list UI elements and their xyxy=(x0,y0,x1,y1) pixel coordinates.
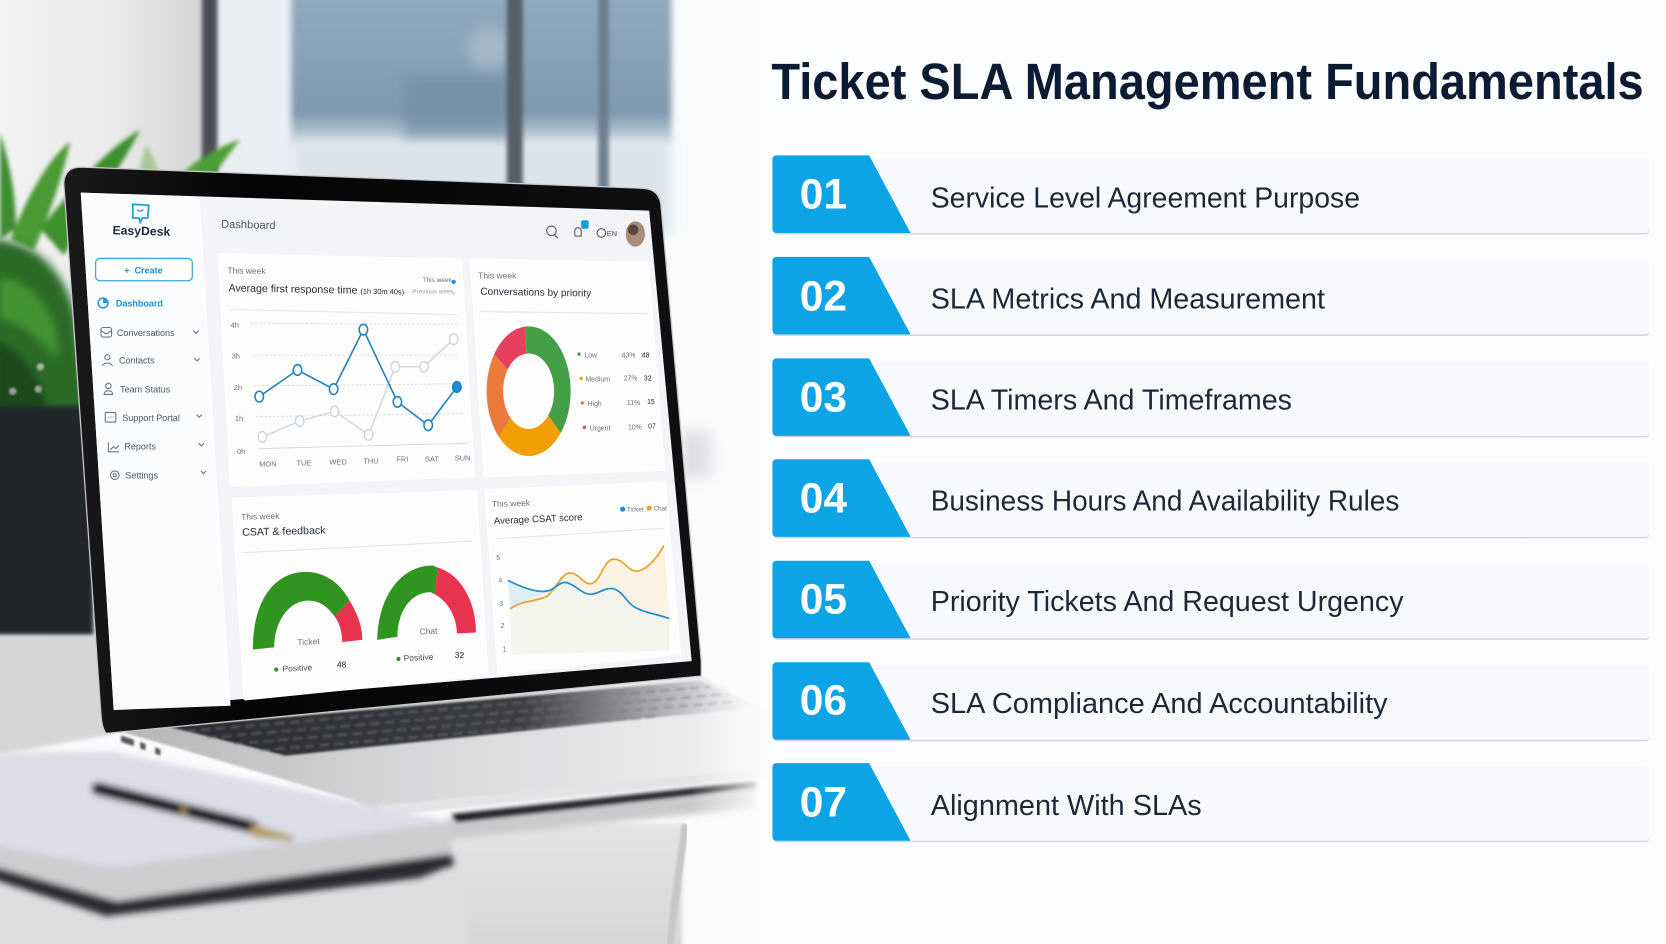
row 02 xyxy=(772,257,1649,336)
card: average first response time: MON xyxy=(259,460,277,469)
donut legend: 43% xyxy=(622,352,635,359)
donut legend: Medium xyxy=(585,377,610,384)
card: average first response time: 0h xyxy=(237,447,245,456)
card: average first response time xyxy=(220,255,473,485)
gauge: chat: Chat xyxy=(419,626,438,637)
area chart xyxy=(508,545,669,655)
card: average CSAT score: Ticket xyxy=(627,506,644,513)
sidebar menu: Reports xyxy=(124,442,156,452)
top bar: Dashboard xyxy=(221,219,276,232)
row 04: Business Hours And Availability Rules xyxy=(931,485,1399,517)
donut chart xyxy=(487,326,571,456)
keyboard xyxy=(166,680,760,756)
card: average CSAT score xyxy=(487,484,679,673)
sidebar xyxy=(81,193,231,710)
card: CSAT and feedback: CSAT & feedback xyxy=(242,525,326,539)
top bar xyxy=(221,219,645,247)
sidebar menu: Support Portal xyxy=(122,413,180,423)
card: average first response time: 3h xyxy=(232,351,240,360)
row 04: 04 xyxy=(800,475,847,522)
card: average CSAT score: This week xyxy=(492,498,531,509)
card: average first response time: FRI xyxy=(396,454,408,463)
card: average first response time: SUN xyxy=(455,453,470,462)
row 01: Service Level Agreement Purpose xyxy=(931,182,1360,214)
row 03: SLA Timers And Timeframes xyxy=(931,384,1292,416)
row 04 xyxy=(772,459,1649,538)
card: conversations by priority: Conversations by priority xyxy=(480,287,592,300)
card: conversations by priority xyxy=(472,261,663,475)
donut legend: 27% xyxy=(624,376,637,383)
donut legend: 15 xyxy=(647,399,655,406)
gauge: chat xyxy=(377,566,476,663)
card: average CSAT score: 1 xyxy=(503,647,507,654)
card: CSAT and feedback: This week xyxy=(241,511,280,522)
card: average first response time: This week xyxy=(423,277,452,284)
photo background: office window and wall xyxy=(0,0,771,944)
gauge: chat: 32 xyxy=(455,650,464,660)
row 07: Alignment With SLAs xyxy=(931,790,1202,822)
gauge: ticket: 48 xyxy=(337,659,347,669)
card: average first response time: 4h xyxy=(231,321,239,330)
notebook and pen xyxy=(0,751,454,916)
donut legend: 48 xyxy=(642,352,650,359)
donut legend xyxy=(577,352,656,433)
row 05: Priority Tickets And Request Urgency xyxy=(931,586,1404,618)
card: average CSAT score: 5 xyxy=(496,555,500,562)
card: average CSAT score: 3 xyxy=(499,601,503,608)
donut legend: 10% xyxy=(628,425,642,432)
sidebar menu xyxy=(98,298,206,480)
card: average first response time: This week xyxy=(227,265,267,276)
this week line xyxy=(255,324,461,431)
sidebar menu: Dashboard xyxy=(116,298,163,308)
card: CSAT and feedback xyxy=(234,492,487,698)
gauge: ticket xyxy=(253,572,362,674)
laptop base and keyboard xyxy=(109,676,767,822)
card: average CSAT score: Chat xyxy=(653,505,667,512)
laptop screen: dashboard xyxy=(81,193,692,710)
logo: EasyDesk xyxy=(112,223,171,239)
row 05 xyxy=(772,561,1649,640)
laptop lid xyxy=(64,167,701,733)
row 06 xyxy=(772,662,1649,741)
card: average first response time: THU xyxy=(363,457,379,466)
gauge: ticket: Ticket xyxy=(297,636,321,647)
laptop ports xyxy=(121,736,160,756)
plant xyxy=(0,130,240,636)
card: average first response time: WED xyxy=(329,458,347,467)
card: average first response time: Average first response time (1h 30m 40s) xyxy=(228,282,405,297)
card: average first response time: SAT xyxy=(425,454,439,463)
row 02: 02 xyxy=(800,274,847,321)
pen xyxy=(98,789,291,839)
card: average CSAT score: 2 xyxy=(500,623,504,630)
row 06: 06 xyxy=(800,677,847,724)
row 03 xyxy=(772,358,1649,437)
card: average first response time: TUE xyxy=(296,459,311,468)
donut legend: Urgent xyxy=(590,426,610,433)
create button xyxy=(96,258,192,281)
row 05: 05 xyxy=(800,576,847,623)
row 01: 01 xyxy=(800,171,847,218)
sidebar menu: Settings xyxy=(125,470,158,480)
logo xyxy=(112,204,171,239)
donut legend: Low xyxy=(584,352,597,359)
card: conversations by priority: This week xyxy=(478,271,517,281)
sidebar menu: Contacts xyxy=(119,356,155,366)
card: average first response time: Previous week xyxy=(412,289,454,296)
top bar: EN xyxy=(607,229,617,238)
donut legend: 07 xyxy=(648,423,656,430)
row 03: 03 xyxy=(800,374,847,421)
white fade towards content column xyxy=(691,0,771,944)
row 01 xyxy=(772,155,1649,235)
row 02: SLA Metrics And Measurement xyxy=(931,283,1325,315)
row 07 xyxy=(772,763,1649,842)
sidebar menu: Team Status xyxy=(120,384,171,394)
gauge: ticket: Positive xyxy=(282,662,313,674)
donut legend: 11% xyxy=(627,400,640,407)
sidebar menu: Conversations xyxy=(117,328,175,338)
create button: + Create xyxy=(124,265,163,275)
row 07: 07 xyxy=(800,779,847,826)
donut legend: High xyxy=(588,401,602,408)
plant pot xyxy=(0,406,94,636)
card: average CSAT score: 4 xyxy=(498,578,502,585)
card: average first response time: 1h xyxy=(235,414,243,423)
donut legend: 32 xyxy=(644,376,652,383)
previous week line xyxy=(258,334,458,442)
card: average first response time: 2h xyxy=(234,383,242,392)
row 06: SLA Compliance And Accountability xyxy=(931,688,1388,720)
table surface xyxy=(0,636,756,944)
card: average CSAT score: Average CSAT score xyxy=(494,512,583,527)
gauge: chat: Positive xyxy=(403,652,434,663)
